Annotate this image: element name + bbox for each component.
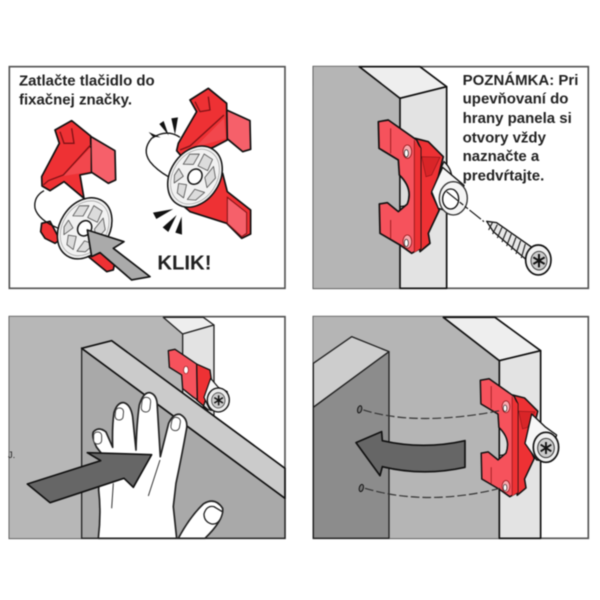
note text: naznačte a <box>463 148 540 165</box>
small red clip <box>168 349 212 410</box>
panel 2: pre-drill note <box>313 67 588 288</box>
panel front face <box>313 67 400 288</box>
red clip <box>378 120 443 253</box>
note text: POZNÁMKA: Pri <box>463 72 578 89</box>
right spring loop <box>146 133 180 177</box>
panel 4: hang the panel <box>313 317 588 538</box>
note text: upevňovaní do <box>463 91 568 108</box>
thumb <box>178 501 223 538</box>
right clip body <box>177 88 227 159</box>
dark push arrow <box>27 453 152 503</box>
wall face <box>313 317 499 538</box>
back panel top <box>163 317 214 334</box>
upper hole <box>357 405 363 413</box>
back panel edge <box>183 325 214 427</box>
back panel edge <box>499 351 541 538</box>
tube and screw head <box>525 414 559 462</box>
panel 1: press the button <box>9 67 285 288</box>
panel edge face <box>400 87 447 288</box>
dashed guide line <box>447 192 484 222</box>
lower dashed guide <box>365 488 500 497</box>
note text <box>463 72 578 184</box>
left wheel <box>46 187 123 269</box>
note text: predvŕtajte. <box>463 167 544 184</box>
right clip lower part <box>178 173 251 238</box>
heading: Zatlačte tlačidlo do <box>19 73 155 90</box>
note text: otvory vždy <box>463 129 547 146</box>
left clip lower red part <box>41 221 115 272</box>
KLIK label: KLIK! <box>157 252 212 274</box>
click ticks bottom <box>153 209 182 235</box>
right clip plate <box>227 110 251 152</box>
back wall <box>9 317 183 538</box>
right wheel <box>157 136 233 217</box>
tube end cap <box>439 182 467 215</box>
left spring loop <box>35 191 58 228</box>
heading line 2: fixačnej značky. <box>19 91 132 108</box>
left clip back plate <box>90 136 116 183</box>
panel 3: press the panel by hand <box>8 317 285 538</box>
curved dark arrow <box>356 432 465 476</box>
lower hole <box>358 484 364 492</box>
front panel face <box>313 352 389 538</box>
left clip body <box>42 121 91 198</box>
front panel top <box>313 337 389 407</box>
red clip <box>480 379 538 497</box>
front panel face <box>82 348 285 538</box>
back panel top <box>443 317 541 361</box>
white tube <box>432 167 464 214</box>
grey push arrow <box>87 230 150 280</box>
screw <box>487 221 551 275</box>
panel top face <box>359 67 447 98</box>
click ticks top <box>149 117 178 137</box>
cylinder behind clip <box>440 162 452 183</box>
screw head <box>204 378 229 412</box>
hand <box>93 393 187 538</box>
front panel top edge <box>82 341 285 498</box>
upper dashed guide <box>363 410 500 418</box>
stray text fragment: J. <box>8 450 15 460</box>
note text: hrany panela si <box>463 110 572 127</box>
